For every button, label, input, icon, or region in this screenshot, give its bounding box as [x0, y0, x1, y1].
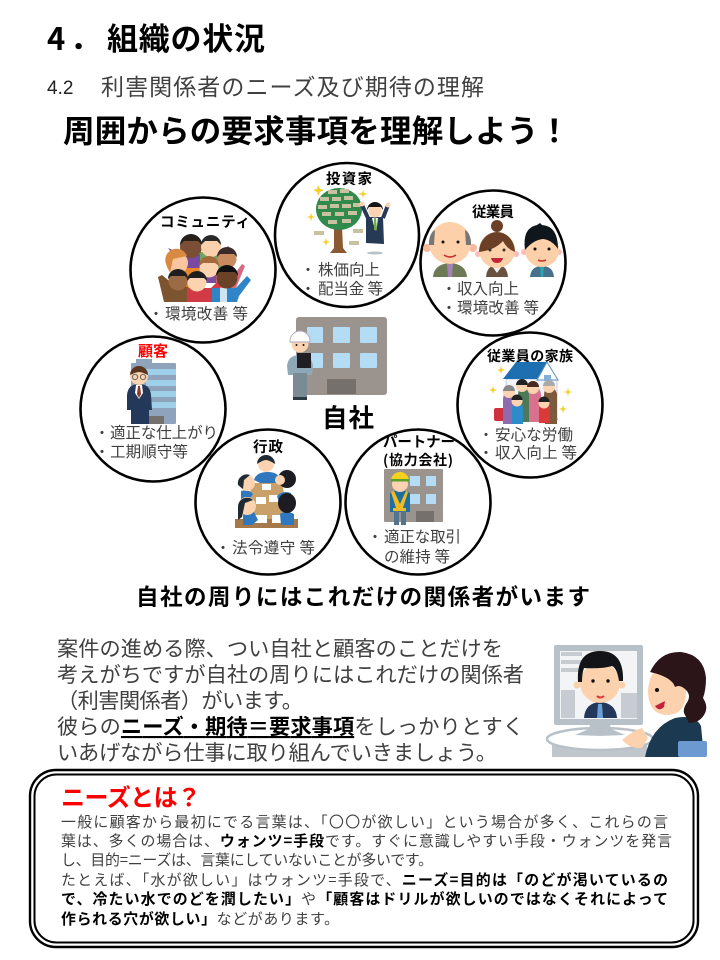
title: ．	[70, 14, 101, 59]
panel: employees: 収入向上	[457, 277, 519, 299]
icon: money tree and investor	[307, 185, 390, 254]
panel: employees: ・	[441, 278, 457, 299]
callout body text: で、冷たい水でのどを潤したい」や「顧客はドリルが欲しいのではなくそれによって	[61, 888, 668, 909]
section heading: 4.2	[47, 78, 73, 99]
callout body text	[61, 811, 672, 929]
text block: explanation	[57, 632, 524, 767]
panel: employees: ・	[441, 297, 457, 318]
panel: customer: 顧客	[138, 340, 168, 361]
callout body text: 一般に顧客から最初にでる言葉は、「〇〇が欲しい」という場合が多く、これらの言	[61, 811, 668, 832]
panel: investor: ・	[300, 278, 316, 299]
label: own company: 自社	[322, 398, 374, 435]
callout heading: ニーズとは？	[61, 778, 201, 813]
panel: employee family: 従業員の家族	[487, 346, 573, 366]
panel: employee family: 収入向上 等	[495, 441, 577, 463]
panel: government	[196, 430, 340, 574]
icon: construction worker and building	[384, 469, 443, 525]
icon: three employees	[423, 220, 562, 277]
panel: employees: 環境改善 等	[457, 296, 539, 318]
panel: partner	[346, 430, 490, 574]
callout body text: し、目的=ニーズは、言葉にしていないことが多いです。	[61, 849, 433, 870]
section heading: 利害関係者のニーズ及び期待の理解	[101, 68, 484, 102]
panel: employees	[420, 190, 566, 336]
panel: government: ・	[215, 537, 231, 558]
icon: customer in front of building	[127, 359, 176, 424]
text block: explanation: 考えがちですが自社の周りにはこれだけの関係者	[57, 658, 524, 689]
panel: investor: ・	[300, 259, 316, 280]
icon: company building with site worker	[287, 317, 387, 400]
panel: customer	[80, 336, 226, 482]
icon: video call illustration	[547, 645, 707, 757]
text block: explanation: （利害関係者）がいます。	[57, 684, 303, 715]
icon: crowd of people	[158, 234, 251, 302]
panel: employee family	[458, 332, 602, 478]
panel: community: 環境改善 等	[165, 302, 248, 324]
callout: what are needs	[30, 770, 698, 947]
panel: employee family: ・	[478, 424, 494, 445]
panel: customer: ・	[94, 441, 110, 462]
panel: government: 法令遵守 等	[232, 536, 315, 558]
caption: 自社の周りにはこれだけの関係者がいます	[136, 580, 590, 612]
text block: explanation: 案件の進める際、つい自社と顧客のことだけを	[57, 632, 503, 663]
panel: partner: の維持 等	[384, 545, 450, 567]
panel: partner: 適正な取引	[384, 525, 461, 547]
panel: investor	[275, 163, 419, 307]
panel: community	[130, 198, 276, 342]
callout body text: 作られる穴が欲しい」などがあります。	[61, 908, 339, 929]
panel: partner: (協力会社)	[383, 450, 453, 470]
main heading: 周囲からの要求事項を理解しよう！	[63, 106, 570, 152]
panel: employees: 従業員	[472, 201, 514, 222]
panel: partner: パートナー	[383, 431, 455, 452]
panel: employee family: 安心な労働	[495, 423, 573, 445]
panel: investor: 投資家	[326, 168, 372, 189]
panel: partner: ・	[367, 526, 383, 547]
title: 組織の状況	[107, 14, 265, 59]
panel: customer: 適正な仕上がり	[110, 421, 218, 443]
panel: customer: 工期順守等	[110, 440, 188, 462]
icon: meeting around table	[235, 455, 298, 528]
callout body text: 葉は、多くの場合は、ウォンツ=手段です。すぐに意識しやすい手段・ウォンツを発言	[61, 830, 672, 851]
text block: explanation: いあげながら仕事に取り組んでいきましょう。	[57, 736, 497, 767]
panel: community: コミュニティ	[160, 211, 250, 232]
callout body text: たとえば、「水が欲しい」はウォンツ=手段で、ニーズ=目的は「のどが渇いているの	[61, 869, 668, 890]
panel: employee family: ・	[478, 442, 494, 463]
icon: family and house	[489, 362, 572, 424]
title: 4	[47, 14, 65, 59]
panel: community: ・	[148, 303, 164, 324]
panel: government: 行政	[253, 436, 284, 457]
panel: investor: 配当金 等	[318, 277, 383, 299]
panel: customer: ・	[94, 422, 110, 443]
text block: explanation: 彼らのニーズ・期待＝要求事項をしっかりとすく	[57, 710, 524, 741]
panel: investor: 株価向上	[318, 258, 380, 280]
